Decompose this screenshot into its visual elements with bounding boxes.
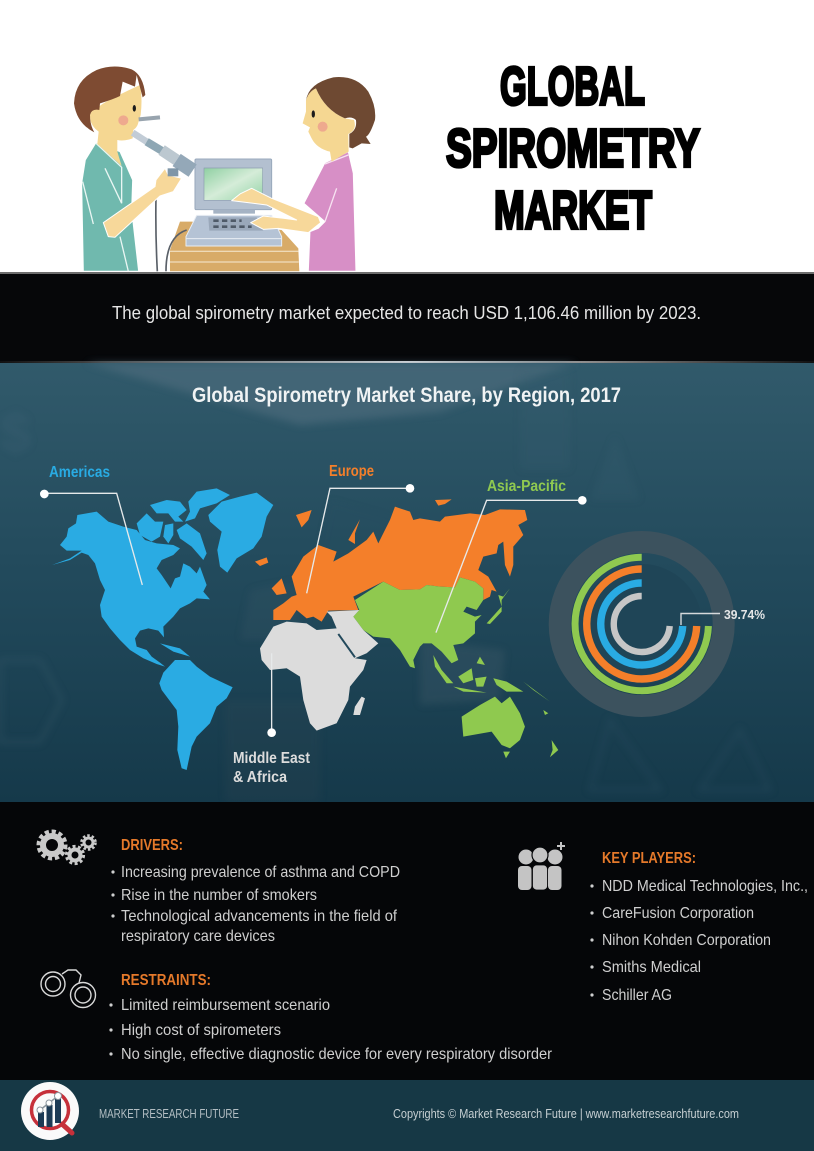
leader: Europe [307,484,414,593]
key players list: Schiller AG [602,987,672,1004]
callout: 39.74%: 39.74% [724,607,765,622]
spirometer handheld [133,117,193,176]
drivers heading: DRIVERS: [121,837,183,854]
nurse head [303,88,355,162]
leader: Middle East and Africa [267,653,276,737]
icon: gears [38,832,96,864]
ring: Europe [587,569,697,679]
keyboard console [186,215,282,246]
drivers list: Increasing prevalence of asthma and COPD [121,864,400,881]
patient hair [74,66,145,132]
key players heading: KEY PLAYERS: [602,850,696,867]
copyright: Copyrights © Market Research Future | www.marketresearchfuture.com [393,1107,739,1121]
company name: MARKET RESEARCH FUTURE [99,1107,239,1121]
restraints list: No single, effective diagnostic device for every respiratory disorder [121,1046,553,1063]
drivers list [111,864,400,945]
icon: people [518,842,565,890]
patient head [90,85,142,166]
key players list [590,878,808,1004]
world map [40,484,587,770]
panel: regional market share [0,361,814,802]
market forecast band [0,272,814,362]
label: Middle East and Africa [233,750,311,786]
ring: Asia-Pacific [575,557,708,691]
restraints list [109,997,553,1063]
nurse top [304,152,356,271]
restraints list: High cost of spirometers [121,1022,281,1039]
monitor [195,159,272,214]
label: Americas: Americas [49,464,110,481]
title: GLOBAL [500,56,645,116]
logo [21,1082,79,1140]
title: MARKET [494,180,652,240]
header background [0,0,814,272]
panel: regional market share: $ [0,401,31,464]
callout: 39.74% [681,607,765,625]
map: Europe and Russia [255,499,527,622]
key players list: CareFusion Corporation [602,905,754,922]
label: Europe: Europe [329,463,374,480]
nurse hair [306,77,375,148]
label: Middle East and Africa: Middle East [233,750,311,767]
panel: drivers, restraints, key players [0,802,814,1080]
illustration: patient and nurse with spirometer [74,66,375,271]
drivers list: Technological advancements in the field of [121,908,398,925]
icon: handcuffs [41,970,96,1008]
forecast text: The global spirometry market expected to reach USD 1,106.46 million by 2023. [112,303,701,323]
key players list: Smiths Medical [602,959,701,976]
title: SPIROMETRY [446,118,700,178]
restraints list: Limited reimbursement scenario [121,997,330,1014]
title [446,56,700,240]
label: Middle East and Africa: & Africa [233,769,287,786]
drivers list: Rise in the number of smokers [121,887,317,904]
cables [156,197,187,271]
footer [0,1080,814,1151]
leader: Asia-Pacific [436,496,587,633]
key players list: Nihon Kohden Corporation [602,932,771,949]
leader: Americas [40,490,142,585]
label: Asia-Pacific: Asia-Pacific [487,478,566,495]
radial chart [560,542,724,706]
map: Asia-Pacific [353,577,558,758]
patient arm and hand [103,168,182,237]
table [170,222,299,271]
drivers list: respiratory care devices [121,928,275,945]
chart heading: Global Spirometry Market Share, by Region, 2017 [192,384,621,407]
map: Americas [52,488,273,770]
ring: Middle East and Africa [614,596,670,652]
map: Middle East and Africa [260,610,378,731]
nurse arms and hands [232,188,321,233]
patient gown [82,143,139,271]
restraints heading: RESTRAINTS: [121,972,211,989]
ring: Americas [601,583,683,665]
